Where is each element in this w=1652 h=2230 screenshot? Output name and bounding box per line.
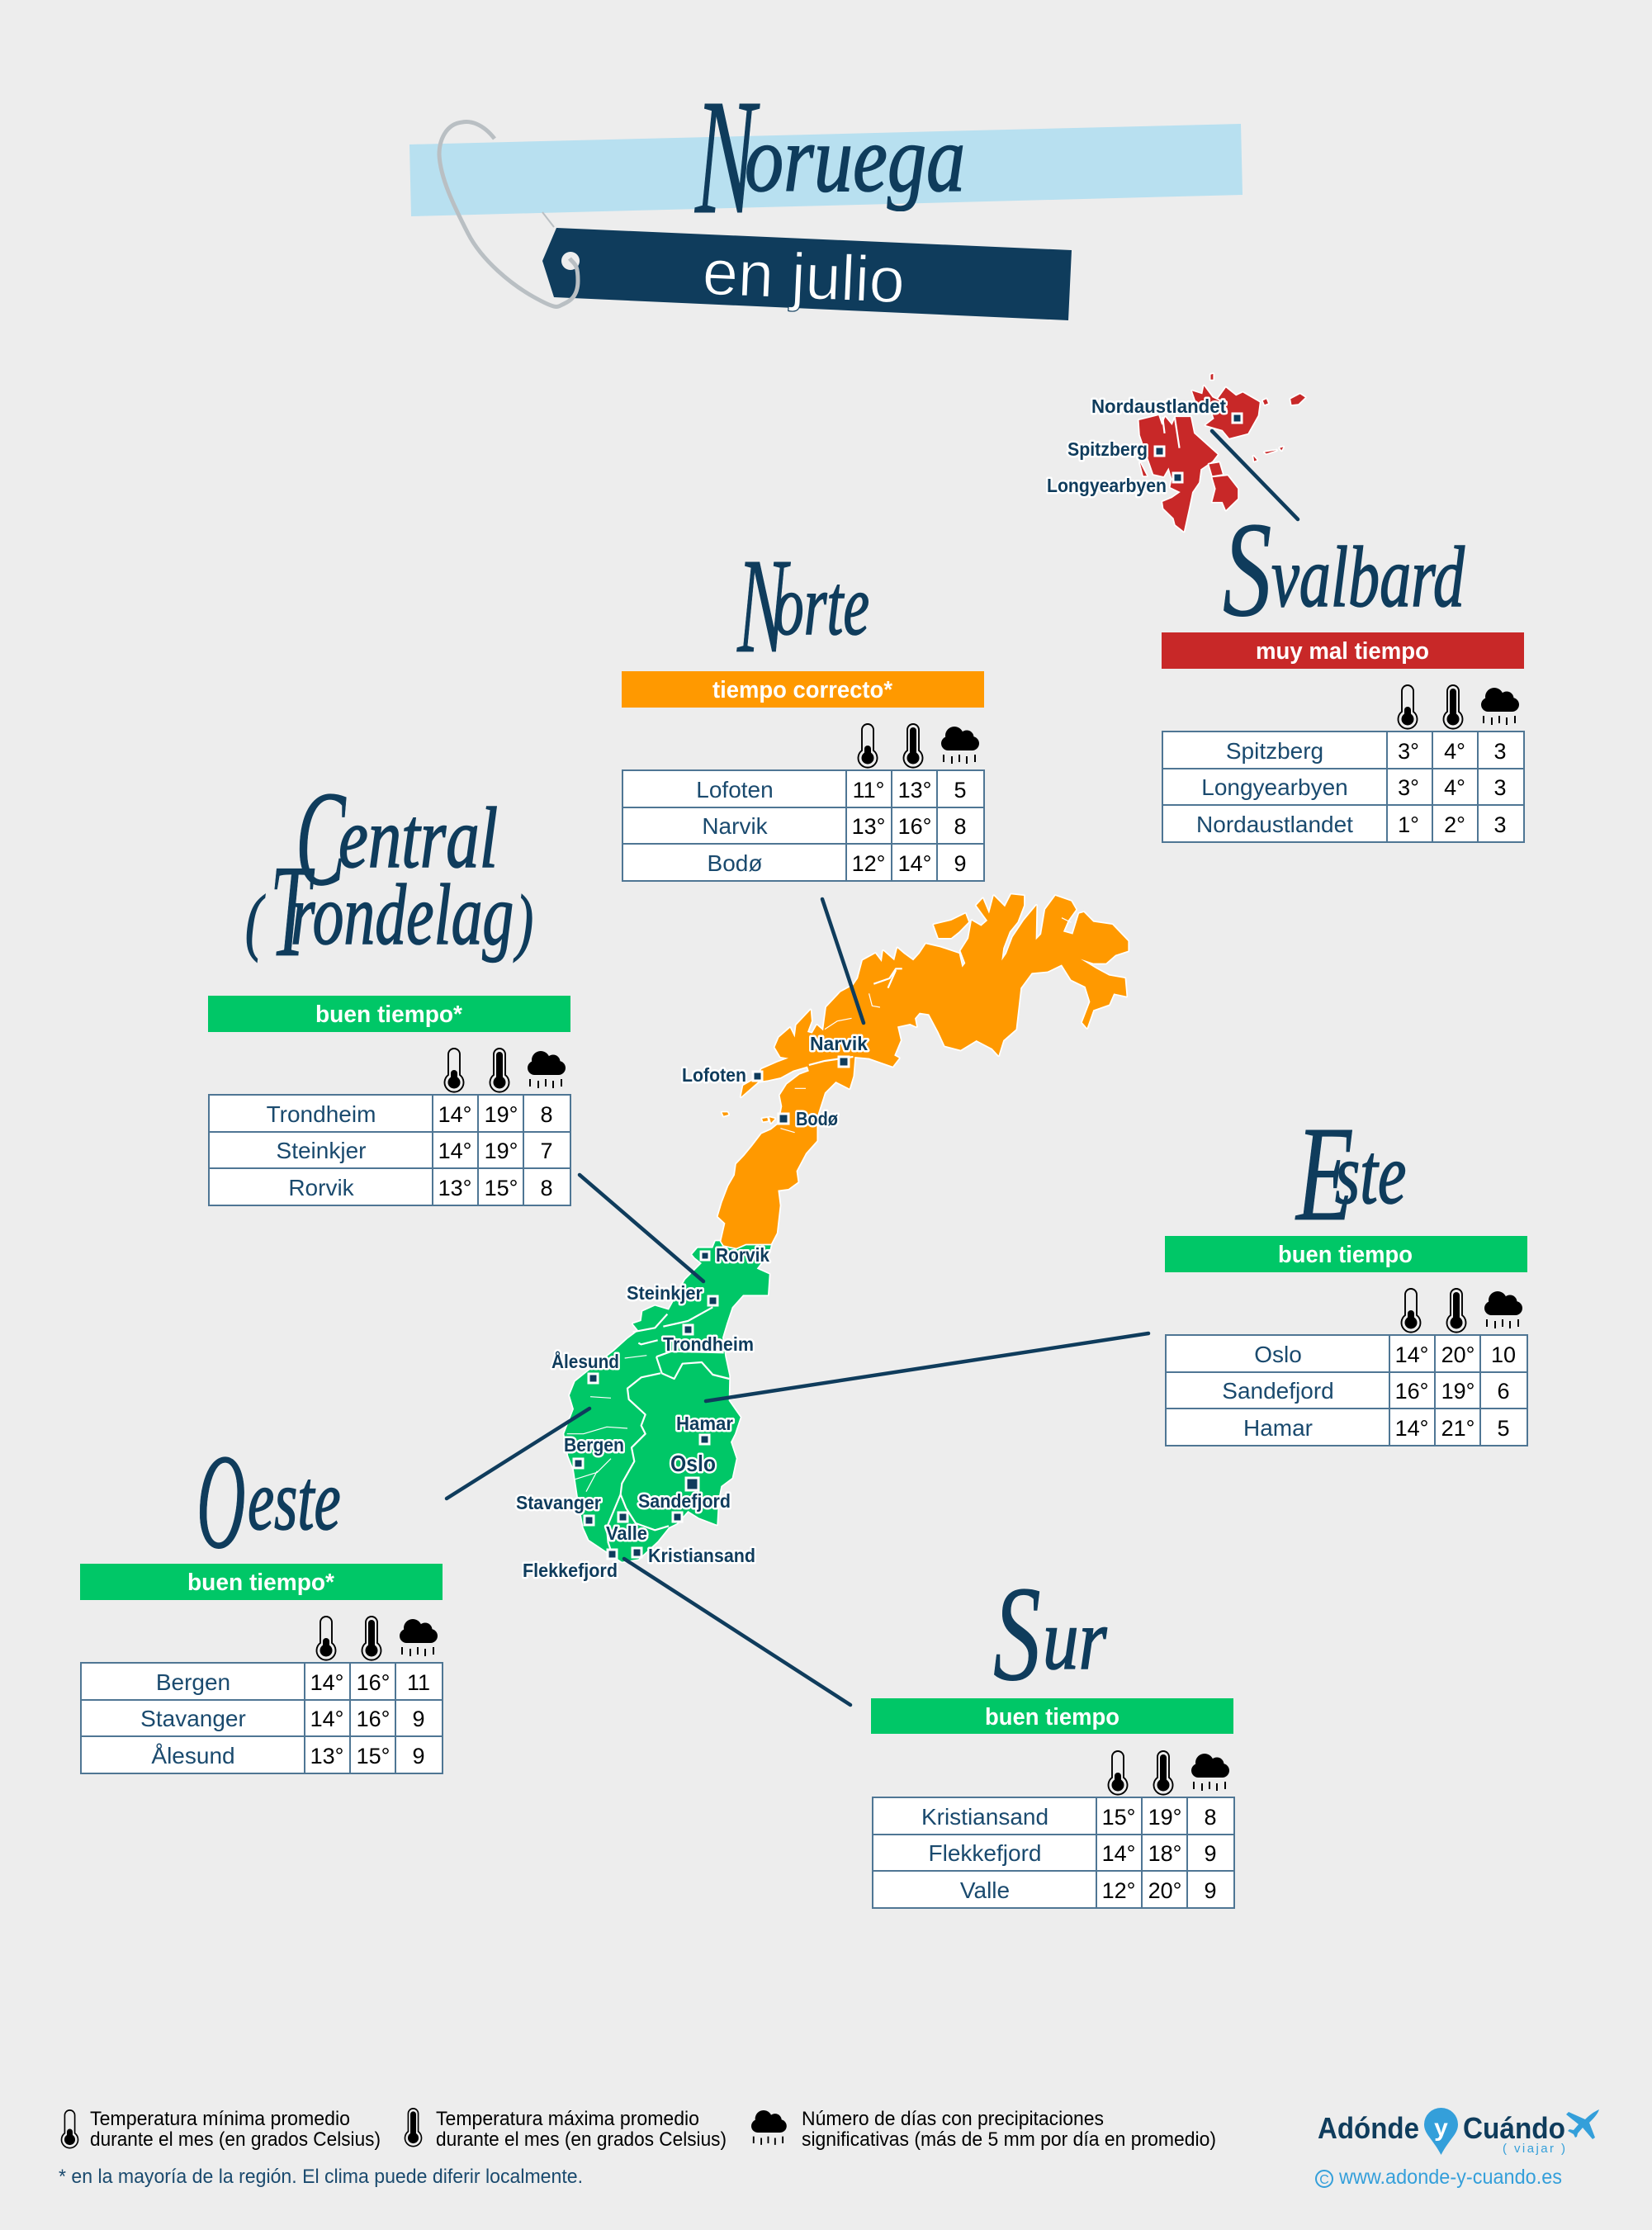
status bar: tiempo correcto — [622, 671, 984, 708]
heading: Norte: orte — [774, 556, 869, 653]
weather table: Central: 13° — [438, 1176, 471, 1200]
weather table: Norte: 13° — [898, 778, 931, 803]
heading: Norte — [737, 564, 869, 652]
weather table: Svalbard: 3 — [1493, 739, 1507, 764]
icon: rain cloud — [400, 1619, 438, 1656]
weather table: Norte: 8 — [954, 814, 967, 839]
weather table: Oeste: 14° — [310, 1707, 343, 1731]
weather table: Norte: Bodø — [708, 850, 762, 876]
map: Svalbard — [1139, 374, 1305, 531]
map city labels: Rorvik — [716, 1244, 769, 1266]
weather table: Central: Rorvik — [288, 1175, 355, 1200]
weather table: Este: 19° — [1441, 1379, 1474, 1404]
icon: thermometer low — [444, 1049, 464, 1092]
region: north Norway — [718, 894, 1128, 1248]
status bar: buen tiempo: buen tiempo — [985, 1704, 1119, 1730]
status bar: muy mal tiempo: muy mal tiempo — [1256, 638, 1429, 665]
status bar: buen tiempo: buen tiempo* — [187, 1570, 335, 1596]
weather table: Sur: 19° — [1148, 1805, 1181, 1830]
weather table: Central: Trondheim — [267, 1101, 376, 1127]
map city labels: Bodø — [796, 1108, 838, 1129]
logo copyright circle — [1316, 2171, 1332, 2187]
map city labels: Steinkjer — [627, 1282, 703, 1304]
panel: Este — [1165, 1131, 1527, 1446]
weather table: Svalbard: 3 — [1493, 775, 1507, 800]
icon: thermometer low — [1402, 1289, 1420, 1333]
map city labels: Hamar — [676, 1413, 733, 1434]
map: mainland Norway — [564, 894, 1128, 1562]
legend text: maximum temperature: Temperatura máxima promedio — [436, 2108, 699, 2130]
panel: Sur — [871, 1589, 1234, 1908]
luggage tag string — [439, 122, 578, 306]
weather table: Este: 10 — [1491, 1342, 1516, 1367]
thin string segment — [542, 212, 554, 227]
footnote: * en la mayoría de la región. El clima puede diferir localmente. — [59, 2166, 583, 2188]
weather table: Este: 16° — [1395, 1379, 1428, 1404]
weather table: Svalbard: 4° — [1444, 775, 1465, 800]
weather table: Sur: 20° — [1148, 1878, 1181, 1903]
map city labels: Trondheim — [663, 1333, 754, 1355]
weather table: Oeste: 9 — [412, 1744, 425, 1768]
weather table: Sur: Flekkefjord — [929, 1840, 1041, 1866]
legend text: precipitation days — [802, 2108, 1216, 2151]
status bar: buen tiempo — [208, 996, 570, 1032]
heading: Central (Trondelag): ) — [516, 881, 533, 963]
map city labels: Sandefjord — [638, 1490, 731, 1512]
weather table: Central: 19° — [485, 1102, 518, 1127]
icon: thermometer high — [1443, 685, 1463, 729]
logo copyright circle: C — [1319, 2173, 1329, 2187]
weather table: Oeste: Ålesund — [151, 1743, 235, 1768]
map city labels: Ålesund — [551, 1350, 619, 1372]
island: Nordaustlandet — [1205, 388, 1260, 438]
status bar: buen tiempo: buen tiempo* — [315, 1001, 463, 1028]
dark luggage tag — [542, 228, 1072, 320]
status bar: buen tiempo: buen tiempo — [1278, 1242, 1413, 1268]
weather table: Este: 14° — [1395, 1416, 1428, 1441]
legend text: precipitation days: significativas (más de 5 mm por día en promedio) — [802, 2128, 1216, 2151]
panel: Oeste — [80, 1459, 443, 1773]
weather table: Central: 15° — [485, 1176, 518, 1200]
weather table: Oeste: Bergen — [156, 1669, 230, 1695]
weather table: Norte: Narvik — [702, 813, 769, 839]
legend icon: maximum temperature — [405, 2109, 422, 2147]
icon: thermometer high — [903, 724, 923, 768]
legend icon: minimum temperature — [61, 2110, 78, 2148]
icon: thermometer high — [1446, 1289, 1466, 1333]
map city labels: Flekkefjord — [523, 1560, 618, 1581]
legend text: maximum temperature: durante el mes (en grados Celsius) — [436, 2128, 727, 2151]
weather table: Sur: 15° — [1102, 1805, 1135, 1830]
weather table: Este: 20° — [1441, 1342, 1474, 1367]
weather table: Este: 14° — [1395, 1342, 1428, 1367]
logo tagline: ( viajar ) — [1503, 2142, 1565, 2156]
weather table: Svalbard: Longyearbyen — [1201, 774, 1348, 800]
weather table: Central — [209, 1049, 570, 1205]
title: Noruega — [695, 99, 966, 233]
icon: rain cloud — [1484, 1291, 1522, 1328]
weather table: Svalbard: Nordaustlandet — [1196, 812, 1353, 837]
weather table: Sur: 9 — [1204, 1878, 1217, 1903]
weather table: Sur: 9 — [1204, 1841, 1217, 1866]
weather table: Oeste: 11 — [407, 1670, 430, 1695]
heading: Oeste: este — [248, 1451, 341, 1548]
weather table: Sur: Valle — [960, 1877, 1010, 1903]
heading: Sur: S — [993, 1558, 1041, 1709]
map city labels: Narvik — [810, 1033, 868, 1054]
weather table: Central: 14° — [438, 1102, 471, 1127]
weather table: Este: 21° — [1441, 1416, 1474, 1441]
weather table: Oeste: 13° — [310, 1744, 343, 1768]
weather table: Norte: 12° — [852, 851, 885, 876]
weather table: Svalbard — [1162, 685, 1524, 842]
map city labels: Lofoten — [682, 1064, 746, 1086]
weather table: Este: Hamar — [1243, 1415, 1313, 1441]
weather table: Svalbard: 3 — [1493, 812, 1507, 837]
legend text: precipitation days: Número de días con precipitaciones — [802, 2108, 1104, 2130]
title: Noruega: oruega — [745, 107, 965, 211]
light blue band — [409, 124, 1243, 216]
icon: thermometer low — [1399, 685, 1417, 729]
weather table: Central: 8 — [540, 1176, 553, 1200]
status bar: buen tiempo — [1165, 1236, 1527, 1272]
weather table: Central: 7 — [540, 1139, 553, 1163]
icon: thermometer low — [1108, 1751, 1128, 1795]
icon: rain cloud — [941, 727, 979, 764]
weather table: Norte: Lofoten — [696, 777, 774, 803]
heading: Este — [1296, 1131, 1406, 1222]
island: Spitzbergen — [1139, 415, 1218, 531]
map city labels: Valle — [606, 1522, 647, 1544]
icon: rain cloud — [1481, 688, 1519, 725]
weather table: Norte: 9 — [954, 851, 967, 876]
heading: Central (Trondelag): C — [296, 763, 346, 914]
weather table: Central: Steinkjer — [277, 1138, 366, 1163]
map city labels: Nordaustlandet — [1091, 395, 1226, 417]
weather table: Central: 8 — [540, 1102, 553, 1127]
icon: rain cloud — [1191, 1754, 1229, 1791]
title: Noruega: N — [695, 66, 755, 248]
icon: thermometer high — [362, 1617, 381, 1660]
weather table: Svalbard: 4° — [1444, 739, 1465, 764]
icon: rain cloud — [528, 1051, 566, 1088]
logo pin with y — [1424, 2108, 1458, 2155]
heading: Central (Trondelag): entral — [338, 789, 498, 886]
weather table: Oeste: 15° — [357, 1744, 390, 1768]
heading: Central (Trondelag): T — [270, 837, 310, 984]
legend — [59, 2108, 1216, 2188]
weather table: Sur: 8 — [1204, 1805, 1217, 1830]
website url: www.adonde-y-cuando.es — [1338, 2166, 1562, 2189]
heading: Svalbard: S — [1223, 494, 1271, 645]
status bar: muy mal tiempo — [1162, 632, 1524, 669]
weather table: Svalbard: 1° — [1398, 812, 1419, 837]
weather table: Sur — [873, 1751, 1234, 1908]
weather table: Svalbard: Spitzberg — [1226, 738, 1323, 764]
map city labels — [516, 395, 1226, 1581]
weather table: Oeste — [81, 1617, 443, 1773]
weather table: Norte: 11° — [853, 778, 884, 803]
panel: Central (Trondelag) — [208, 797, 570, 1205]
map city markers — [574, 414, 1242, 1559]
weather table: Oeste: 16° — [357, 1670, 390, 1695]
heading: Este: ste — [1335, 1125, 1406, 1222]
weather table: Central: 14° — [438, 1139, 471, 1163]
small islands — [1140, 374, 1305, 510]
icon: thermometer high — [1154, 1751, 1172, 1795]
status bar: buen tiempo — [871, 1698, 1233, 1734]
map city labels: Oslo — [670, 1451, 716, 1476]
weather table: Sur: Kristiansand — [921, 1804, 1048, 1830]
weather table: Central: 19° — [485, 1139, 518, 1163]
title banner — [409, 99, 1243, 320]
weather table: Este: 6 — [1497, 1379, 1510, 1404]
heading: Norte: N — [737, 530, 788, 681]
status bar: tiempo correcto: tiempo correcto* — [712, 677, 893, 703]
weather table: Este: 5 — [1497, 1416, 1510, 1441]
weather table: Norte: 5 — [954, 778, 967, 803]
weather table: Norte: 16° — [898, 814, 931, 839]
heading: Oeste: O — [196, 1426, 246, 1577]
logo pin with y: y — [1434, 2114, 1448, 2142]
icon: thermometer low — [317, 1617, 335, 1660]
legend text: minimum temperature — [90, 2108, 381, 2151]
map city labels: Bergen — [564, 1434, 624, 1456]
icon: thermometer low — [859, 724, 877, 768]
logo wordmark right: Cuándo — [1463, 2111, 1565, 2145]
weather table: Este: Sandefjord — [1222, 1378, 1334, 1404]
heading: Oeste — [196, 1459, 340, 1548]
weather table: Sur: 12° — [1102, 1878, 1135, 1903]
panel: Norte — [622, 564, 984, 881]
panel: Svalbard — [1162, 526, 1524, 842]
weather table: Svalbard: 3° — [1398, 775, 1419, 800]
weather table: Svalbard: 3° — [1398, 739, 1419, 764]
weather table: Este: Oslo — [1254, 1342, 1302, 1367]
heading: Este: E — [1296, 1098, 1354, 1249]
map city labels: Stavanger — [516, 1492, 601, 1513]
legend text: minimum temperature: Temperatura mínima promedio — [90, 2108, 350, 2130]
weather table: Oeste: 16° — [357, 1707, 390, 1731]
weather table: Sur: 18° — [1148, 1841, 1181, 1866]
status bar: buen tiempo — [80, 1564, 443, 1600]
heading: Central (Trondelag): rondelag — [291, 866, 514, 963]
weather table: Oeste: 14° — [310, 1670, 343, 1695]
weather table: Este — [1166, 1289, 1527, 1446]
legend text: maximum temperature — [436, 2108, 727, 2151]
icon: thermometer high — [490, 1049, 509, 1092]
logo: Adónde y Cuándo — [1316, 2108, 1599, 2189]
map city labels: Spitzberg — [1067, 438, 1148, 460]
heading: Central (Trondelag): ( — [245, 881, 263, 963]
logo wordmark left: Adónde — [1318, 2111, 1419, 2145]
weather table: Sur: 14° — [1102, 1841, 1135, 1866]
connector lines — [447, 431, 1298, 1705]
weather table: Norte: 13° — [852, 814, 885, 839]
heading: Sur: ur — [1043, 1591, 1107, 1688]
legend icon: rain cloud — [751, 2110, 787, 2145]
logo plane — [1566, 2109, 1599, 2139]
weather table: Oeste: 9 — [412, 1707, 425, 1731]
map city labels: Kristiansand — [648, 1545, 755, 1566]
weather table: Norte — [622, 724, 984, 881]
heading: Central (Trondelag) — [245, 797, 533, 960]
heading: Sur — [993, 1589, 1106, 1680]
legend text: minimum temperature: durante el mes (en grados Celsius) — [90, 2128, 381, 2151]
subtitle: en julio: en julio — [701, 235, 906, 317]
weather table: Oeste: Stavanger — [140, 1706, 246, 1731]
region: south and central Norway — [564, 1241, 772, 1562]
weather table: Svalbard: 2° — [1444, 812, 1465, 837]
heading: Svalbard: valbard — [1271, 528, 1465, 625]
weather table: Norte: 14° — [898, 851, 931, 876]
map city labels: Longyearbyen — [1047, 475, 1167, 496]
